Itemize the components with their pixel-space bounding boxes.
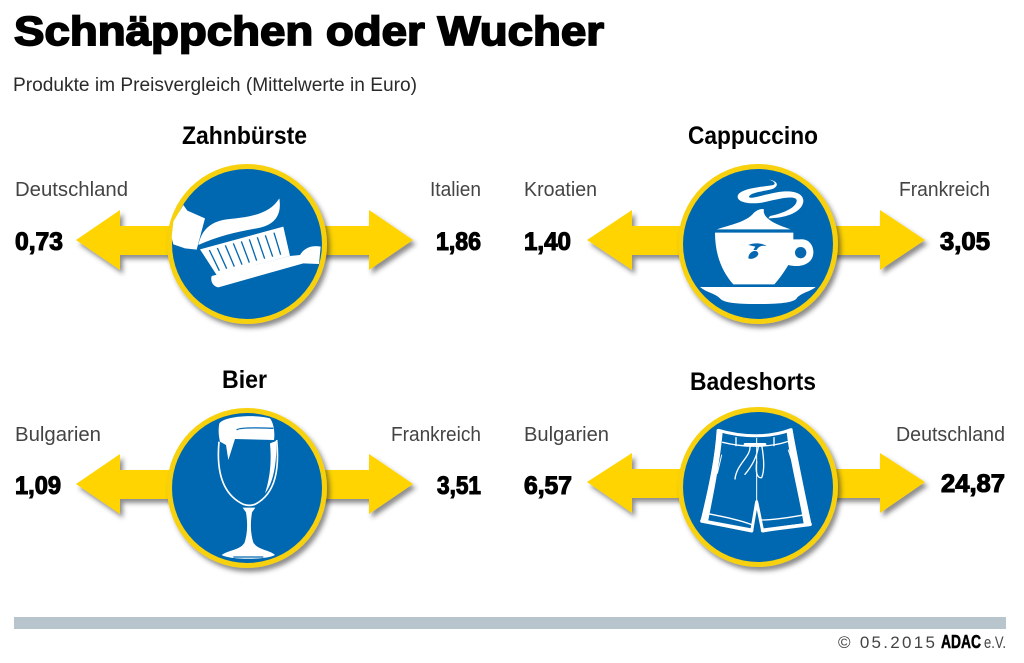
panel: Cappuccino	[524, 122, 990, 324]
icon: swim shorts	[701, 428, 811, 531]
double arrow	[587, 453, 925, 513]
icon: coffee cup	[700, 179, 816, 304]
credit: ADAC	[941, 632, 981, 652]
subtitle: Produkte im Preisvergleich (Mittelwerte in Euro)	[13, 75, 417, 96]
label: Bulgarien: Bulgarien	[15, 424, 101, 446]
circle badge	[678, 407, 838, 567]
label: Bulgarien: Bulgarien	[524, 424, 609, 446]
value: 1,40: 1,40	[524, 228, 571, 256]
heading: Cappuccino: Cappuccino	[688, 122, 818, 150]
label: Italien: Italien	[430, 179, 481, 201]
value: 24,87: 24,87	[941, 470, 1005, 498]
label: Deutschland: Deutschland	[15, 179, 128, 201]
title: Schnäppchen oder Wucher	[14, 8, 604, 54]
label: Frankreich: Frankreich	[391, 424, 481, 446]
heading: Bier: Bier	[222, 366, 267, 394]
panel: Bier	[15, 366, 481, 568]
footer bar	[14, 617, 1006, 629]
panel: Badeshorts	[524, 368, 1005, 567]
double arrow	[587, 210, 925, 270]
label: Deutschland: Deutschland	[896, 424, 1005, 446]
circle badge	[678, 164, 838, 324]
panel: Zahnbürste	[15, 122, 481, 324]
value: 0,73: 0,73	[15, 228, 63, 256]
icon: toothbrush	[172, 198, 321, 287]
value: 3,05: 3,05	[940, 228, 990, 256]
value: 1,09: 1,09	[15, 472, 61, 500]
label: Kroatien: Kroatien	[524, 179, 597, 201]
double arrow	[76, 454, 413, 514]
label: Frankreich: Frankreich	[899, 179, 990, 201]
circle badge	[167, 408, 327, 568]
value: 6,57: 6,57	[524, 472, 572, 500]
icon: beer glass	[218, 416, 278, 559]
value: 3,51: 3,51	[437, 472, 481, 500]
credit: e.V.	[984, 633, 1006, 652]
double arrow	[76, 210, 413, 270]
value: 1,86: 1,86	[436, 228, 481, 256]
heading: Badeshorts: Badeshorts	[690, 368, 816, 396]
credit	[838, 632, 1006, 652]
heading: Zahnbürste: Zahnbürste	[182, 122, 307, 150]
circle badge	[167, 164, 327, 324]
credit: © 05.2015	[838, 633, 935, 652]
